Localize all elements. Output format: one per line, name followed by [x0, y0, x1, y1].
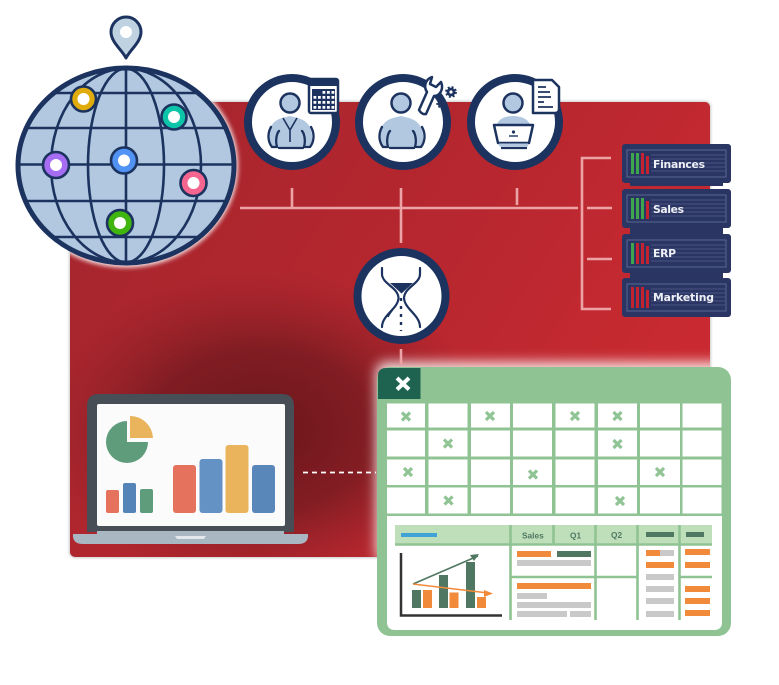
server: Finances — [622, 144, 731, 183]
server: ERP — [622, 234, 731, 273]
connector lines — [240, 158, 612, 364]
server rack list — [622, 144, 731, 317]
map pin: top — [111, 17, 141, 58]
report header row: Sales — [522, 530, 544, 540]
server: Marketing — [622, 278, 731, 317]
large bar chart — [173, 445, 275, 513]
server: Sales: Sales — [653, 203, 684, 216]
map marker: purple — [43, 152, 69, 178]
map marker: pink — [180, 170, 206, 196]
pie chart — [106, 416, 153, 463]
gears — [437, 87, 456, 107]
dotted link between laptop and spreadsheet — [303, 472, 376, 474]
hourglass icon — [358, 252, 446, 340]
report header row — [395, 525, 712, 544]
small bar chart — [106, 483, 153, 513]
server: ERP: ERP — [653, 247, 676, 260]
red background panel — [68, 100, 712, 560]
spreadsheet cell grid — [387, 404, 722, 514]
laptop — [73, 394, 308, 544]
person icon: accountant — [248, 78, 338, 166]
globe — [18, 17, 234, 263]
spreadsheet window — [377, 367, 731, 636]
rack connectors — [630, 180, 723, 281]
cell check marks — [402, 412, 664, 505]
report header row: Q1 — [570, 530, 581, 540]
report sheet — [387, 516, 722, 630]
server: Sales — [622, 189, 731, 228]
map marker: gold — [71, 86, 96, 112]
map marker: teal — [162, 104, 186, 130]
person icon: technician — [359, 77, 456, 166]
report chart — [401, 553, 502, 616]
map marker: green — [107, 210, 133, 236]
map marker: blue — [111, 148, 137, 174]
spreadsheet logo tab — [378, 368, 420, 399]
person icon: laptop user — [471, 78, 559, 166]
server: Finances: Finances — [653, 158, 705, 171]
report header row: Q2 — [611, 530, 622, 540]
server: Marketing: Marketing — [653, 291, 714, 304]
report data bars — [517, 549, 710, 617]
